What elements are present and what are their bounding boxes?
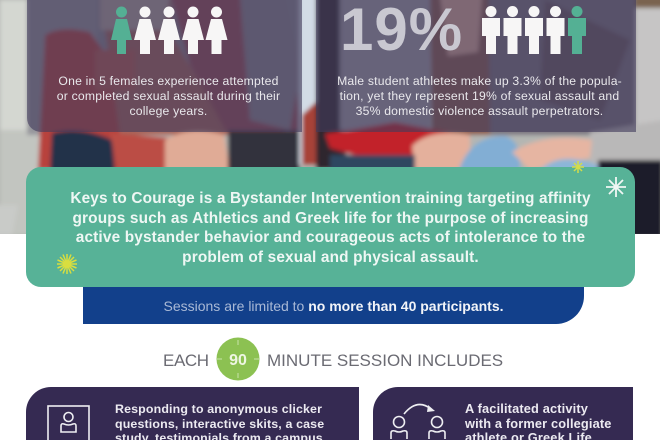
text: male statistic: Male student athletes make up 3.3% of the popula- (337, 74, 622, 88)
icon row: five female figures (111, 6, 228, 54)
text: male statistic: 35% domestic violence assault perpetrators. (356, 104, 603, 118)
panel: blue participant limit bar (83, 280, 584, 324)
heading word: each: EACH (163, 351, 209, 370)
text: program description (70, 190, 591, 266)
panel: clicker questions card (26, 387, 359, 440)
icon: presenter on screen (47, 405, 90, 440)
heading words: minute session includes: MINUTE SESSION INCLUDES (267, 351, 503, 370)
panel: female statistic overlay (27, 0, 302, 132)
icon: small yellow star at panel top (572, 161, 584, 173)
text: female statistic (57, 74, 280, 118)
icon: green 90 minute clock: 90 (229, 352, 247, 369)
panel: facilitated activity card (373, 387, 633, 440)
icon: yellow starburst left (57, 254, 77, 274)
text: clicker questions description: Responding to anonymous clicker (115, 402, 322, 416)
text: female statistic: One in 5 females experience attempted (58, 74, 279, 88)
text: program description: Keys to Courage is a Bystander Intervention training targeting affinity (70, 190, 591, 207)
icon row: five male figures (482, 6, 586, 54)
text: program description: groups such as Athletics and Greek life for the purpose of increasing (72, 210, 589, 226)
text: male statistic (337, 74, 622, 118)
text: female statistic: or completed sexual assault during their (57, 89, 280, 103)
text: clicker questions description (115, 402, 324, 440)
text: facilitated activity description: with a former collegiate (465, 416, 612, 430)
text: female statistic: college years. (130, 104, 208, 118)
text: male statistic: tion, yet they represent 19% of sexual assault and (340, 89, 619, 103)
text: facilitated activity description: A facilitated activity (465, 401, 588, 416)
icon: two people with arrow (390, 404, 446, 439)
background photo: students sitting together (0, 0, 660, 234)
text: session limit: Sessions are limited to no more than 40 participants. (164, 298, 504, 314)
icon: white starburst right (606, 177, 626, 197)
text: program description: problem of sexual and physical assault. (182, 248, 479, 266)
icon: green 90 minute clock (216, 338, 260, 380)
text: program description: active bystander behavior and courageous acts of intolerance to the (76, 229, 585, 246)
heading: each 90 minute session includes (163, 338, 503, 380)
text: facilitated activity description (465, 401, 612, 440)
panel: male statistic overlay (316, 0, 636, 132)
text: clicker questions description: questions, interactive skits, a case (115, 416, 324, 430)
panel: green program description (26, 167, 635, 287)
